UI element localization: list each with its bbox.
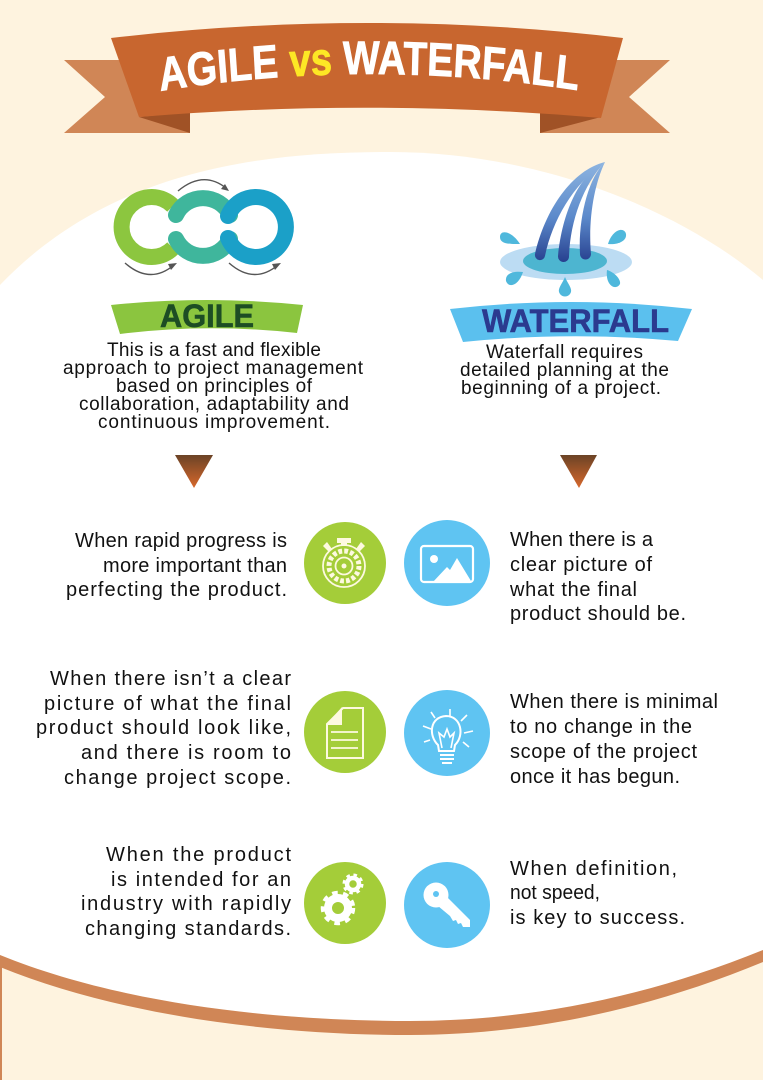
agile point 3 text: When the product: [106, 844, 291, 866]
waterfall point 1 text: product should be.: [510, 603, 686, 625]
waterfall point 1 text: clear picture of: [510, 554, 652, 576]
green ring: [122, 197, 173, 257]
outer pool: [500, 244, 632, 280]
agile point 3 text: industry with rapidly: [81, 893, 291, 915]
icon: picture: [404, 520, 490, 606]
agile description: This is a fast and flexible: [107, 340, 321, 361]
icon: key: [404, 862, 490, 948]
agile description: [63, 340, 364, 433]
waterfall description: detailed planning at the: [460, 360, 669, 381]
waterfall point 3 text: not speed,: [510, 882, 600, 904]
waterfall down arrow: [560, 455, 597, 488]
agile description: collaboration, adaptability and: [79, 394, 349, 415]
agile ribbon: AGILE: [160, 298, 254, 334]
agile logo: [122, 180, 286, 275]
agile point 2 text: and there is room to: [81, 742, 291, 764]
agile down arrow: [175, 455, 213, 488]
waterfall point 3 text: When definition,: [510, 858, 677, 880]
title text: vs: [288, 50, 331, 76]
agile point 3 text: is intended for an: [111, 869, 291, 891]
waterfall point 1 text: what the final: [509, 579, 637, 601]
agile point 1 text: [66, 530, 287, 601]
icon: stopwatch: [304, 522, 386, 604]
teal arcs: [176, 198, 230, 256]
agile description: continuous improvement.: [98, 412, 330, 433]
title banner: [64, 23, 670, 133]
banner tails: [64, 60, 670, 133]
title text: AGILE: [160, 44, 278, 92]
blue ring: [228, 197, 286, 257]
agile description: based on principles of: [116, 376, 313, 397]
waterfall point 2 text: to no change in the: [510, 716, 692, 738]
waterfall point 3 text: [510, 858, 685, 929]
agile point 2 text: picture of what the final: [44, 693, 291, 715]
bottom orange curve: [0, 950, 763, 1080]
icon: gears: [304, 862, 386, 944]
banner main ribbon: [111, 23, 623, 118]
waterfall point 2 text: scope of the project: [510, 741, 697, 763]
waterfall point 2 text: When there is minimal: [510, 691, 718, 713]
agile point 2 text: product should look like,: [36, 717, 291, 739]
inner pool: [523, 248, 607, 274]
agile point 3 text: [81, 844, 291, 940]
agile ribbon: [111, 298, 303, 334]
cycle arrows: [125, 180, 278, 275]
waterfall icon: [500, 162, 632, 296]
water streams: [535, 162, 605, 260]
agile point 2 text: change project scope.: [64, 767, 291, 789]
waterfall point 1 text: When there is a: [510, 529, 654, 551]
agile point 2 text: When there isn’t a clear: [50, 668, 291, 690]
waterfall description: [460, 342, 669, 399]
waterfall point 1 text: [509, 529, 686, 625]
agile point 1 text: When rapid progress is: [75, 530, 287, 552]
title text: [160, 41, 578, 92]
icon: light bulb: [404, 690, 490, 776]
icon: document: [304, 691, 386, 773]
waterfall description: Waterfall requires: [486, 342, 643, 363]
waterfall point 2 text: [510, 691, 718, 788]
waterfall ribbon: WATERFALL: [482, 303, 669, 339]
water drops: [500, 230, 626, 296]
banner folds: [139, 112, 601, 133]
title text: WATERFALL: [342, 41, 578, 90]
agile point 2 text: [36, 668, 291, 789]
agile point 3 text: changing standards.: [85, 918, 291, 940]
waterfall description: beginning of a project.: [461, 378, 661, 399]
agile point 1 text: perfecting the product.: [66, 579, 287, 601]
agile description: approach to project management: [63, 358, 364, 379]
waterfall point 3 text: is key to success.: [510, 907, 685, 929]
agile point 1 text: more important than: [103, 555, 287, 577]
waterfall point 2 text: once it has begun.: [510, 766, 680, 788]
